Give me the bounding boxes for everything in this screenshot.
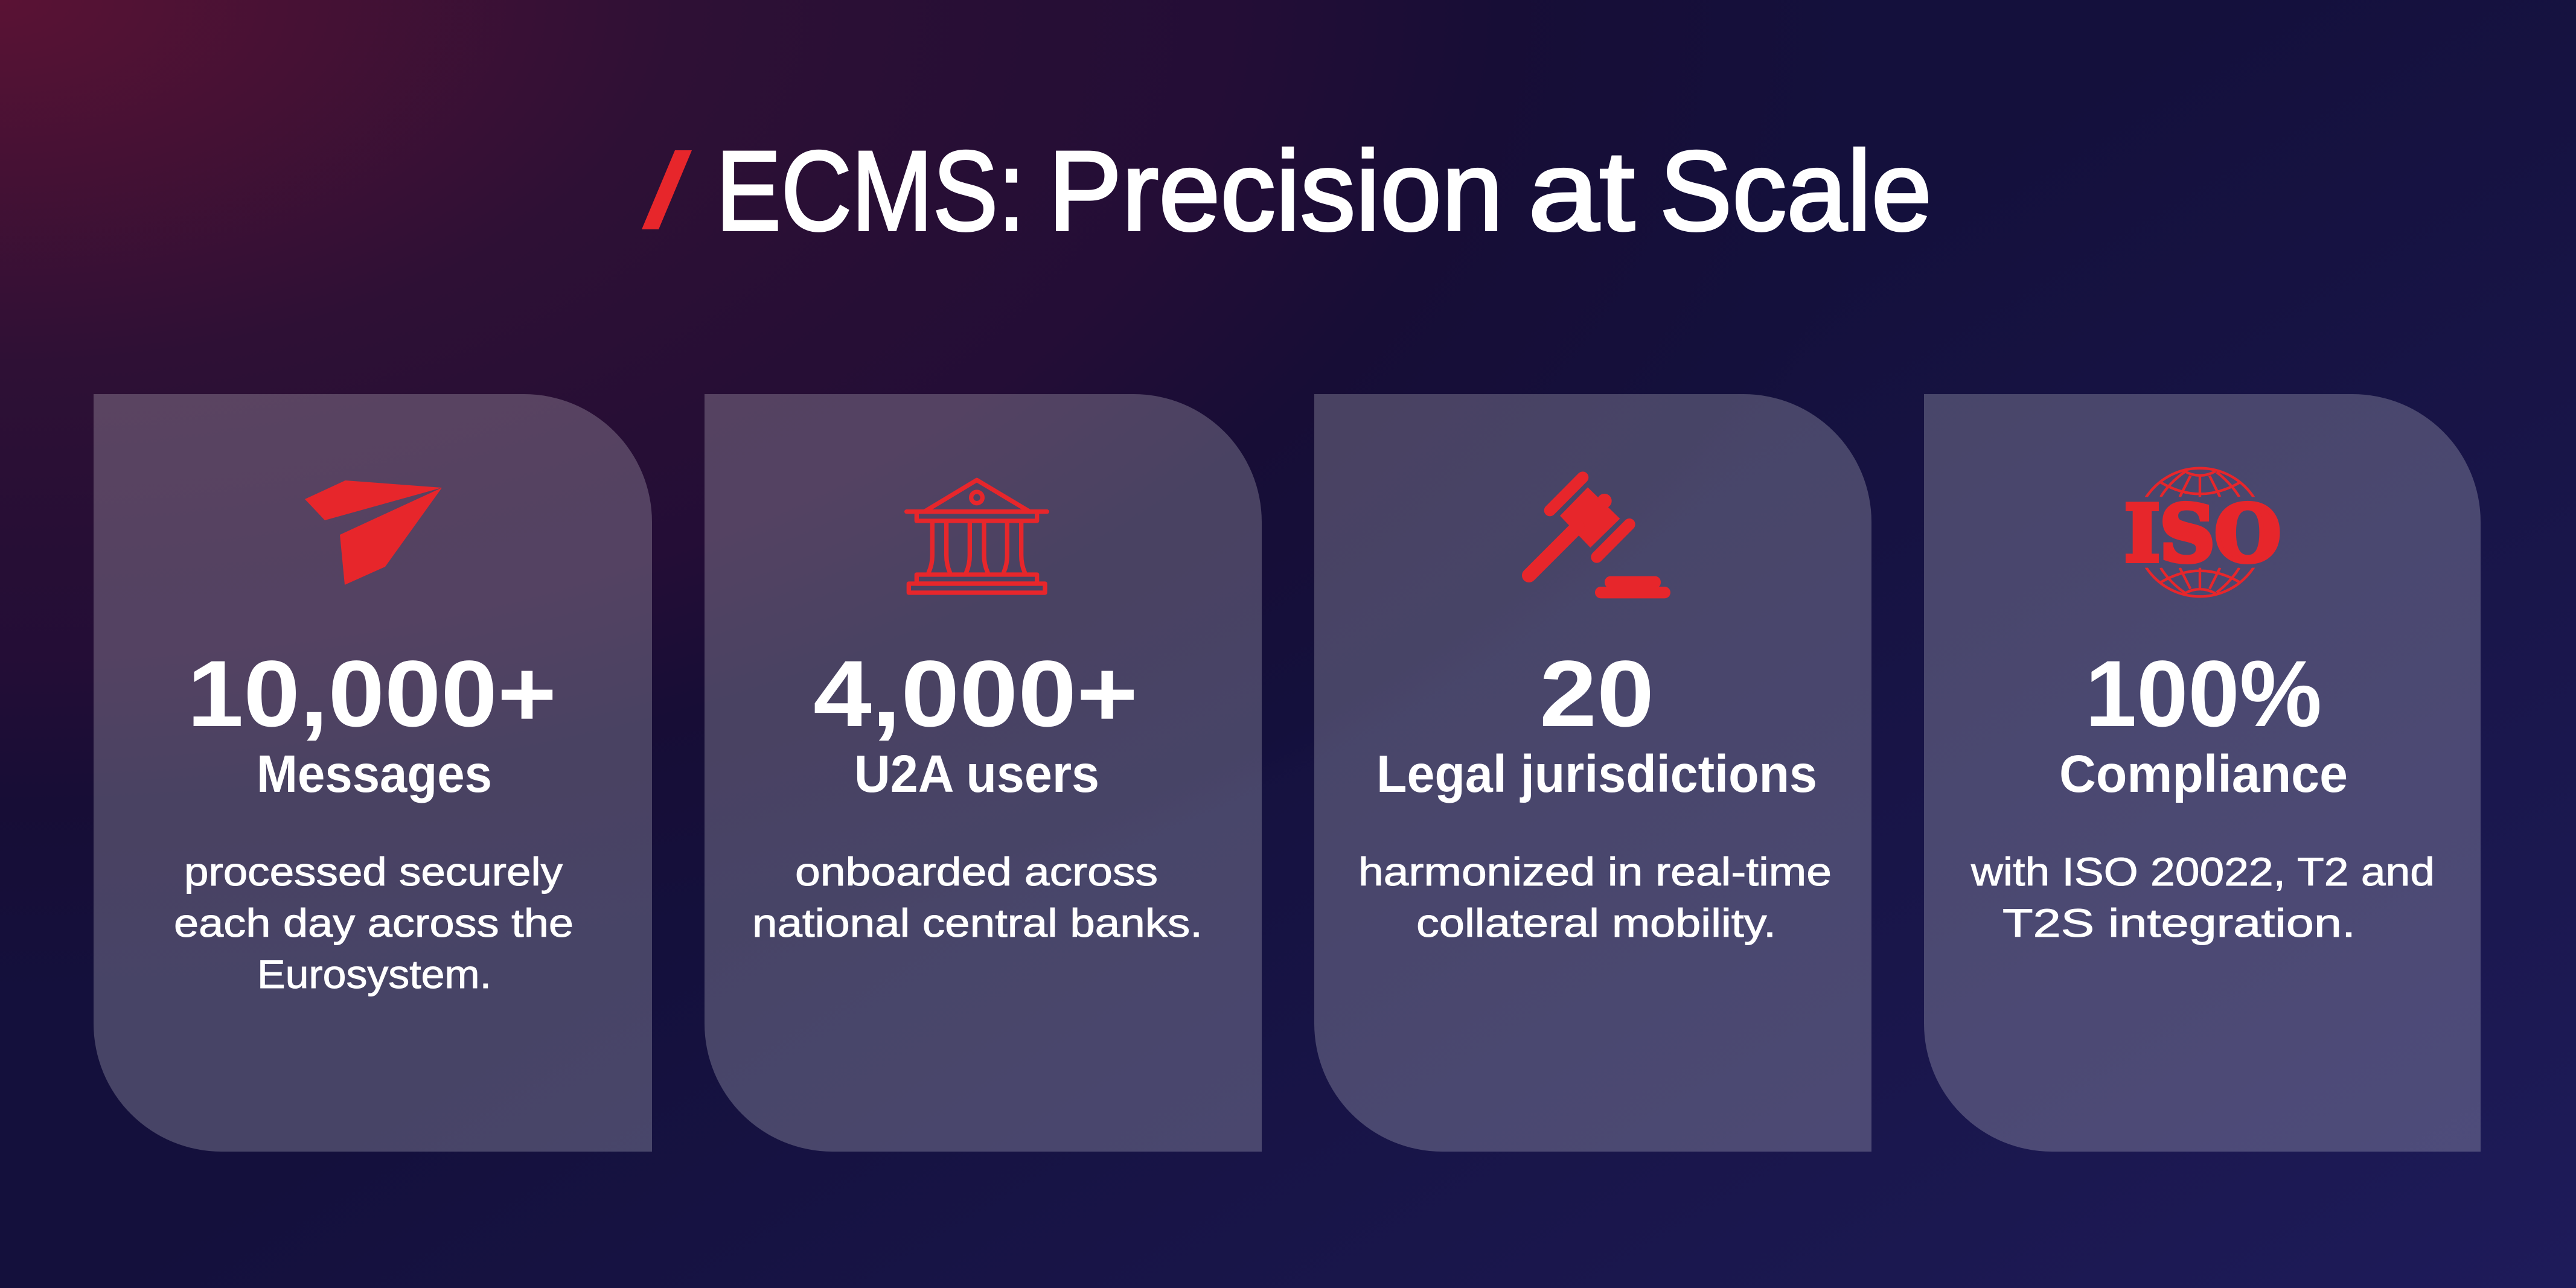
stat: 4,000+: 4,000+ xyxy=(813,642,1138,747)
icon: ISO globe xyxy=(2124,468,2281,596)
icon: paper plane xyxy=(305,480,442,585)
heading text: Precision xyxy=(1048,127,1503,254)
stat: 100%: 100% xyxy=(2085,642,2322,747)
description xyxy=(1970,849,2435,945)
icon: bank building xyxy=(907,480,1047,593)
description: Eurosystem. xyxy=(257,952,491,996)
icon: red slash xyxy=(642,150,692,229)
description: onboarded across xyxy=(795,849,1158,894)
label: U2A users: U2A users xyxy=(854,745,1099,803)
label: Messages: Messages xyxy=(257,745,492,803)
heading text: at xyxy=(1528,127,1635,254)
icon: gavel xyxy=(1529,477,1670,598)
stat: 10,000+: 10,000+ xyxy=(187,642,557,747)
panel: users xyxy=(705,394,1262,1152)
description xyxy=(1358,849,1832,945)
panel: jurisdictions xyxy=(1314,394,1871,1152)
card background xyxy=(1924,394,2481,1152)
stat: 20: 20 xyxy=(1539,642,1654,747)
heading text: ECMS: xyxy=(716,127,1025,254)
heading text xyxy=(716,127,1932,254)
description xyxy=(752,849,1203,945)
card background xyxy=(705,394,1262,1152)
description: national central banks. xyxy=(752,901,1203,945)
title xyxy=(642,127,1932,254)
label: Legal jurisdictions: Legal jurisdictions xyxy=(1376,745,1817,803)
description: collateral mobility. xyxy=(1416,901,1776,945)
description xyxy=(174,849,574,996)
card background xyxy=(1314,394,1871,1152)
description: processed securely xyxy=(184,849,563,894)
description: with ISO 20022, T2 and xyxy=(1970,849,2435,894)
description: each day across the xyxy=(174,901,574,945)
label: Compliance: Compliance xyxy=(2059,745,2348,803)
description: T2S integration. xyxy=(2002,901,2356,945)
panel: compliance xyxy=(1924,394,2481,1152)
icon: ISO globe: ISO xyxy=(2124,489,2281,579)
panel: messages xyxy=(94,394,652,1152)
description: harmonized in real-time xyxy=(1358,849,1832,894)
card background xyxy=(94,394,652,1152)
heading text: Scale xyxy=(1660,127,1932,254)
